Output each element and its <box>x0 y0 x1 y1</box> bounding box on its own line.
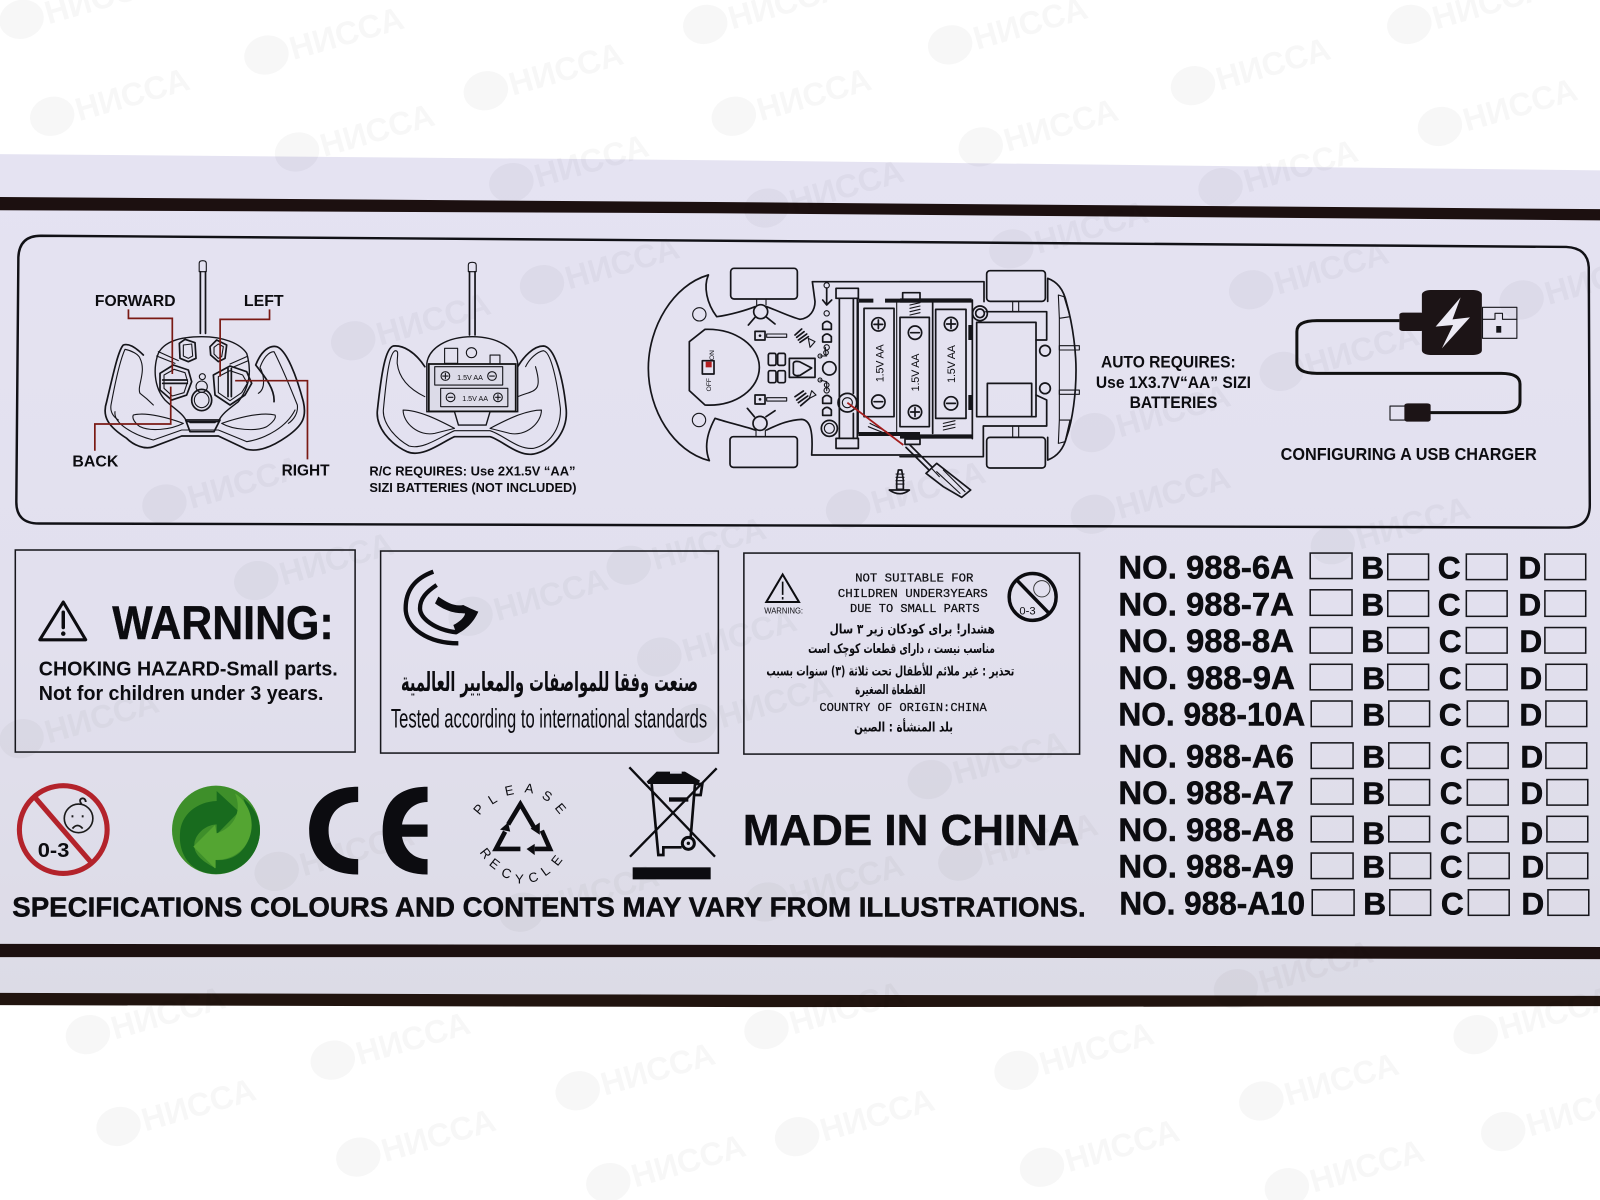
watermarks: НИССА <box>351 1004 474 1072</box>
icon: please recycle <box>470 780 569 887</box>
icon: please recycle: R <box>477 845 495 862</box>
watermarks: НИССА <box>377 1101 500 1169</box>
watermarks: НИССА <box>785 846 908 914</box>
warning text block: NOT SUITABLE FOR <box>855 572 973 586</box>
icon: please recycle: P <box>470 801 487 818</box>
watermarks: НИССА <box>752 60 875 128</box>
row 988-8A: B <box>1361 623 1384 659</box>
watermarks: НИССА <box>285 0 408 67</box>
illustration: remote control back: 1.5V AA <box>462 395 488 403</box>
top dark band <box>0 197 1600 220</box>
row 988-9A <box>1118 659 1587 696</box>
watermarks: НИССА <box>1270 234 1392 301</box>
row 988-A6 <box>1118 737 1587 774</box>
watermarks: НИССА <box>1112 377 1234 444</box>
row 988-A8: NO. 988-A8 <box>1118 811 1294 848</box>
watermarks: НИССА <box>561 229 683 296</box>
icon: please recycle: E <box>552 800 569 817</box>
label: right: RIGHT <box>282 463 330 480</box>
watermarks: НИССА <box>1280 1045 1403 1113</box>
watermarks: НИССА <box>999 91 1122 159</box>
row 988-A7: NO. 988-A7 <box>1118 774 1294 811</box>
text: auto battery requirement <box>1096 353 1251 412</box>
panel: small parts multilingual warning <box>744 553 1080 754</box>
illustration: car underside with battery bay: 1.5V AA <box>875 344 887 382</box>
icon: not for ages 0-3 <box>1009 573 1056 620</box>
text: auto battery requirement: AUTO REQUIRES: <box>1101 353 1236 371</box>
warning text block: DUE TO SMALL PARTS <box>850 602 980 616</box>
icon: please recycle: C <box>500 865 514 882</box>
row 988-A6: NO. 988-A6 <box>1118 737 1294 774</box>
warning text <box>39 659 338 705</box>
row 988-9A: D <box>1519 660 1542 696</box>
row 988-A8 <box>1118 811 1588 851</box>
warning text block: تحذير : غير ملائم للأطفال تحت ثلاثة (٣) سنوات بسبب <box>766 663 1014 680</box>
watermarks: НИССА <box>627 1127 750 1194</box>
watermarks: НИССА <box>1112 458 1234 526</box>
warning text block: بلد المنشأة : الصين <box>854 719 953 736</box>
warning text: CHOKING HAZARD-Small parts. <box>39 659 338 681</box>
text: R/C battery requirement: R/C REQUIRES: Use 2X1.5V “AA” <box>369 464 576 479</box>
row 988-6A <box>1118 549 1586 586</box>
row 988-A9: C <box>1440 849 1463 885</box>
panel: tested to standards <box>381 551 718 753</box>
watermarks: НИССА <box>505 35 627 103</box>
watermarks: НИССА <box>816 1081 938 1148</box>
warning text: Not for children under 3 years. <box>39 683 323 705</box>
row 988-A10: NO. 988-A10 <box>1119 884 1305 921</box>
icon: test logo <box>406 572 478 643</box>
watermarks: НИССА <box>372 285 494 353</box>
icon: green dot recycling <box>172 786 260 874</box>
label: forward: FORWARD <box>95 293 176 310</box>
row 988-9A: B <box>1362 660 1385 696</box>
row 988-A10: D <box>1521 885 1544 921</box>
watermarks: НИССА <box>1300 315 1423 383</box>
watermarks: НИССА <box>295 815 418 883</box>
icon: please recycle: C <box>526 869 541 886</box>
watermarks: НИССА <box>1255 933 1377 1000</box>
row 988-A8: B <box>1362 815 1385 851</box>
icon: not for ages 0-3 red: 0-3 <box>38 840 69 862</box>
watermarks: НИССА <box>489 560 612 628</box>
watermarks: НИССА <box>1306 1132 1428 1199</box>
panel: operating instructions <box>16 236 1590 528</box>
warning text block <box>766 572 1014 736</box>
row 988-A8: C <box>1440 815 1463 851</box>
watermarks: НИССА <box>1212 30 1334 97</box>
row 988-8A: D <box>1519 623 1542 659</box>
watermarks: НИССА <box>1035 1014 1158 1082</box>
label: back: BACK <box>72 453 119 470</box>
watermarks: НИССА <box>714 667 836 735</box>
watermarks: НИССА <box>785 152 908 220</box>
icon: not for ages 0-3 red <box>19 786 107 873</box>
panel: warning <box>15 550 355 752</box>
icon: small warning triangle: WARNING: <box>764 606 803 615</box>
row 988-A8: D <box>1520 815 1543 851</box>
row 988-A10 <box>1119 884 1589 921</box>
row 988-7A <box>1118 585 1586 622</box>
icon: crossed-out wheelie bin <box>629 767 717 879</box>
watermarks: НИССА <box>275 524 398 592</box>
car rear half <box>900 271 1079 497</box>
row 988-10A: B <box>1362 697 1385 733</box>
package card background <box>0 154 1600 1005</box>
row 988-10A <box>1118 696 1587 733</box>
watermarks: НИССА <box>71 60 193 128</box>
watermarks: НИССА <box>979 805 1102 873</box>
row 988-A6: D <box>1520 738 1543 774</box>
row 988-10A: D <box>1519 697 1542 733</box>
row 988-7A: B <box>1361 586 1384 622</box>
icon: please recycle: E <box>487 855 503 873</box>
watermarks: НИССА <box>1459 70 1581 138</box>
warning heading: WARNING: <box>112 597 334 649</box>
watermarks: НИССА <box>183 448 306 516</box>
watermarks: НИССА <box>107 979 229 1046</box>
watermarks: НИССА <box>316 96 438 164</box>
watermarks: НИССА <box>1239 132 1362 199</box>
warning text block: القطعاة الصغيرة <box>855 683 926 698</box>
text: configuring a usb charger: CONFIGURING A USB CHARGER <box>1281 444 1537 464</box>
watermarks: НИССА <box>867 453 989 521</box>
icon: please recycle: L <box>538 863 553 879</box>
bottom card edge <box>0 993 1600 1007</box>
watermarks: НИССА <box>40 683 163 750</box>
row 988-A9: B <box>1362 849 1385 885</box>
warning text block: مناسب نیست ، دارای قطعات کوچک است <box>808 642 995 657</box>
row 988-A9 <box>1118 848 1588 885</box>
label: left: LEFT <box>244 293 284 310</box>
english text: Tested according to international standards <box>391 704 707 734</box>
watermarks: НИССА <box>1351 489 1474 557</box>
icon: please recycle: E <box>548 852 565 869</box>
model number table <box>1118 549 1589 921</box>
icon: warning triangle <box>40 602 86 640</box>
panel outline <box>16 236 1590 528</box>
watermarks: НИССА <box>137 1070 260 1138</box>
watermarks: НИССА <box>596 1035 719 1103</box>
row 988-7A: C <box>1438 586 1461 622</box>
icon: please recycle: Y <box>515 872 524 887</box>
made in china: MADE IN CHINA <box>743 806 1080 855</box>
icon: please recycle: L <box>485 791 500 808</box>
illustration: remote control back <box>377 262 566 454</box>
illustration: car underside with battery bay: OFF <box>706 378 713 391</box>
row 988-A7: D <box>1520 775 1543 811</box>
row 988-A6: C <box>1440 738 1463 774</box>
row 988-10A: C <box>1439 697 1462 733</box>
row 988-A10: B <box>1363 885 1386 921</box>
row 988-A7 <box>1118 774 1588 811</box>
car front half <box>648 268 920 494</box>
watermarks: НИССА <box>647 509 770 577</box>
watermarks: НИССА <box>948 723 1071 791</box>
row 988-9A: C <box>1439 660 1462 696</box>
specifications disclaimer: SPECIFICATIONS COLOURS AND CONTENTS MAY VARY FROM ILLUSTRATIONS. <box>12 891 1086 922</box>
watermarks: НИССА <box>540 856 663 924</box>
row 988-A6: B <box>1362 738 1385 774</box>
warning text block: هشدار! برای کودکان زیر ۳ سال <box>830 623 995 638</box>
bottom dark band <box>0 944 1600 959</box>
row 988-9A: NO. 988-9A <box>1118 659 1295 696</box>
callouts: direction leader lines <box>95 309 307 459</box>
icon: usb charger cable <box>1297 290 1520 422</box>
warning text block: CHILDREN UNDER3YEARS <box>838 587 988 601</box>
illustration: car underside with battery bay: 1.5V AA <box>946 344 958 383</box>
illustration: remote control back: 1.5V AA <box>457 374 483 382</box>
icon: please recycle: E <box>503 782 515 799</box>
row 988-7A: NO. 988-7A <box>1118 585 1294 622</box>
row 988-A10: C <box>1441 885 1464 921</box>
row 988-8A: NO. 988-8A <box>1118 622 1294 659</box>
text: R/C battery requirement: SIZI BATTERIES (NOT INCLUDED) <box>369 480 577 495</box>
watermarks: НИССА <box>1030 193 1153 261</box>
illustration: car underside with battery bay: ON <box>709 350 716 360</box>
watermarks: НИССА <box>678 601 801 669</box>
row 988-10A: NO. 988-10A <box>1118 696 1305 733</box>
warning text block: COUNTRY OF ORIGIN:CHINA <box>819 701 988 715</box>
row 988-7A: D <box>1518 586 1541 622</box>
text: auto battery requirement: Use 1X3.7V“AA” SIZI <box>1096 374 1251 392</box>
icon: not for ages 0-3: 0-3 <box>1019 605 1036 617</box>
watermarks: НИССА <box>785 973 908 1041</box>
row 988-6A: D <box>1518 550 1541 586</box>
illustration: remote control front <box>105 261 305 450</box>
icon: small warning triangle <box>764 574 803 615</box>
text: auto battery requirement: BATTERIES <box>1130 394 1217 412</box>
icon: please recycle: A <box>524 780 535 796</box>
text: R/C battery requirement <box>369 464 577 495</box>
row 988-6A: NO. 988-6A <box>1118 549 1294 586</box>
watermarks: НИССА <box>1061 1111 1183 1179</box>
illustration: car underside with battery bay: 1.5V AA <box>910 353 922 391</box>
row 988-6A: C <box>1438 550 1461 586</box>
row 988-A9: D <box>1521 849 1544 885</box>
icon: please recycle: S <box>540 787 555 805</box>
icon: CE mark <box>309 787 428 874</box>
row 988-8A: C <box>1439 623 1462 659</box>
row 988-A9: NO. 988-A9 <box>1118 848 1294 885</box>
watermarks: НИССА <box>530 127 653 194</box>
illustration: car underside with battery bay <box>648 268 1079 497</box>
row 988-8A <box>1118 622 1586 659</box>
arabic text: صنعت وفقا للمواصفات والمعايير العالمية <box>401 667 698 698</box>
row 988-6A: B <box>1361 550 1384 586</box>
row 988-A7: B <box>1362 775 1385 811</box>
row 988-A7: C <box>1440 775 1463 811</box>
